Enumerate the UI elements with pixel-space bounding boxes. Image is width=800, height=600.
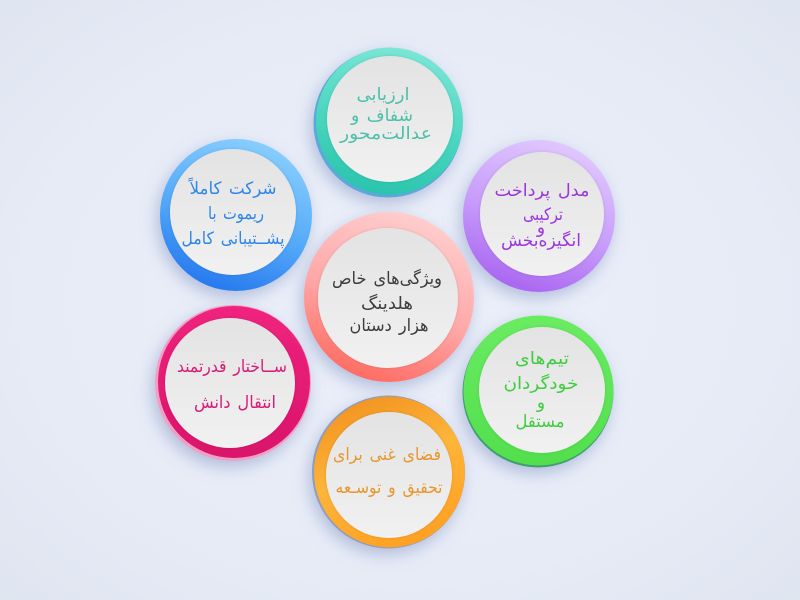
- text: center label: ویژگی‌های خاص: [332, 268, 442, 289]
- text: center label: هلدینگ: [361, 293, 413, 314]
- text: pink label: ســاختار قدرتمند: [177, 357, 287, 377]
- text: purple label: انگیزه‌بخش: [501, 230, 581, 251]
- disc: center inner: [318, 228, 458, 368]
- ring: blue: [160, 139, 312, 291]
- disc: teal inner: [327, 56, 453, 182]
- circle: center coral, special features of Hezar Dastan holding: [304, 212, 474, 382]
- text: green label: مستقل: [516, 412, 564, 432]
- ring: coral: [304, 212, 474, 382]
- text: purple label: و: [536, 218, 545, 238]
- ring: pink: [155, 305, 311, 461]
- text: blue label: ریموت با: [208, 204, 264, 224]
- disc: orange inner: [326, 412, 452, 538]
- disc: blue inner: [170, 149, 296, 275]
- circle: lower right green, autonomous teams: [462, 316, 614, 468]
- ring: orange: [312, 396, 465, 548]
- text: blue label: شرکت کاملاً: [188, 177, 276, 199]
- text: green label: خودگردان: [504, 373, 578, 394]
- text: pink label: انتقال دانش: [194, 393, 276, 413]
- circle: top teal, transparent and fair evaluation: [314, 48, 463, 198]
- text: teal label: شفاف و: [350, 106, 413, 126]
- text: green label: تیم‌های: [515, 349, 569, 369]
- text: center label: [332, 268, 442, 336]
- text: blue label: پشــتیبانی کامل: [182, 229, 285, 249]
- text: pink label: [177, 357, 287, 413]
- text: green label: و: [536, 393, 545, 413]
- circle: upper left blue, fully remote company: [160, 139, 312, 291]
- ring: purple: [463, 140, 615, 292]
- ring: green: [462, 316, 614, 468]
- disc: pink inner: [165, 318, 295, 448]
- text: purple label: ترکیبی: [523, 205, 563, 225]
- text: purple label: مدل پرداخت: [494, 181, 590, 201]
- disc: green inner: [479, 327, 605, 453]
- text: orange label: [333, 445, 443, 498]
- text: teal label: [339, 85, 432, 144]
- text: orange label: فضای غنی برای: [333, 445, 441, 465]
- text: green label: [504, 349, 578, 432]
- text: purple label: [494, 181, 590, 251]
- text: center label: هزار دستان: [350, 316, 428, 336]
- text: blue label: [182, 177, 285, 249]
- text: teal label: عدالت‌محور: [339, 124, 432, 144]
- disc: purple inner: [480, 152, 604, 276]
- ring: teal: [314, 48, 463, 198]
- text: orange label: تحقیق و توسـعه: [336, 478, 443, 498]
- circle: lower left pink, strong knowledge transfer structure: [155, 305, 311, 461]
- circle: bottom orange, rich space for research and development: [312, 396, 465, 548]
- circle: upper right purple, hybrid motivating pay model: [463, 140, 615, 292]
- text: teal label: ارزیابی: [356, 85, 410, 105]
